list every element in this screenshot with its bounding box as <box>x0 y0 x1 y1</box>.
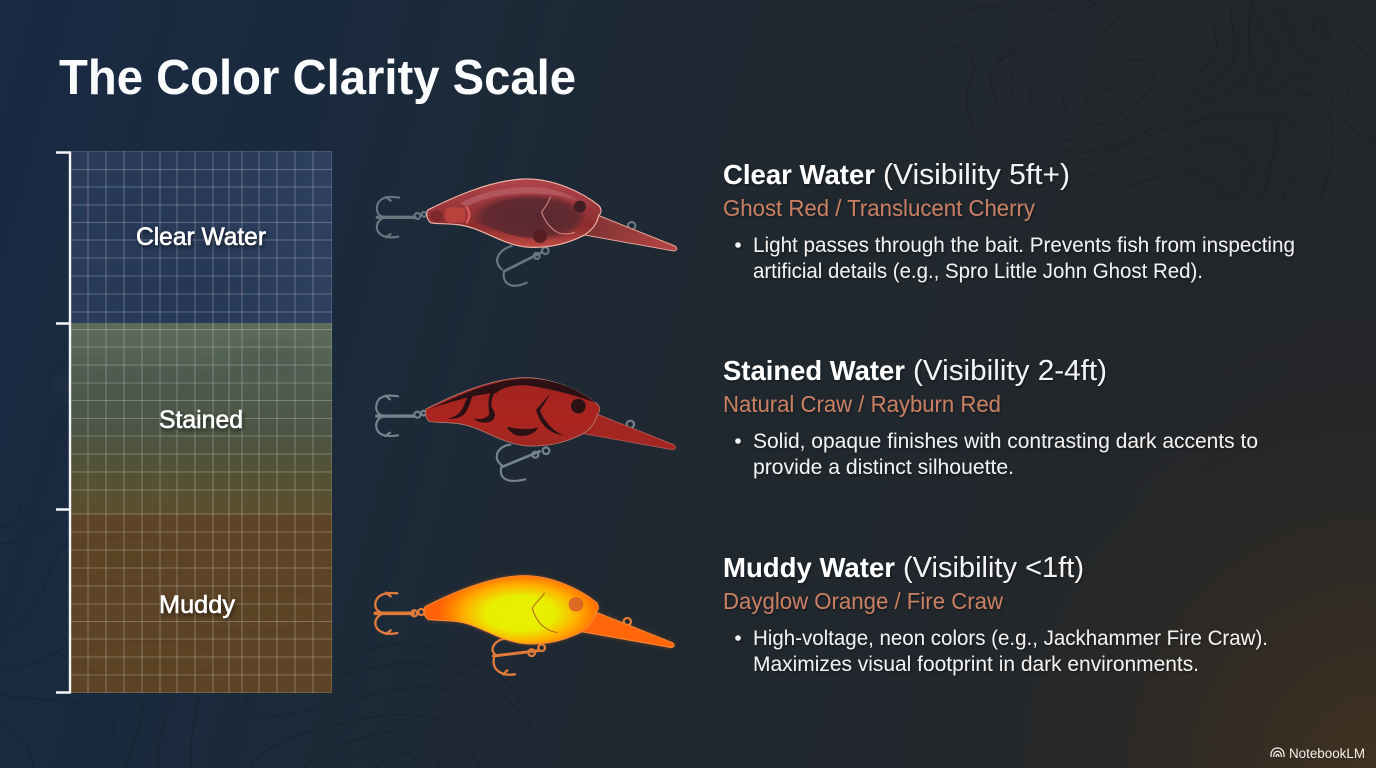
lure: ghost red <box>377 179 677 286</box>
bullet text: Light passes through the bait. Prevents fish from inspecting <box>753 233 1295 257</box>
subtitle: ghost red: Ghost Red / Translucent Cherry <box>723 195 1035 221</box>
bullet text <box>735 429 1258 479</box>
label: Stained: Stained <box>159 406 243 434</box>
bullet text <box>735 233 1295 283</box>
bullet text: Maximizes visual footprint in dark environments. <box>753 652 1199 676</box>
subtitle: dayglow orange: Dayglow Orange / Fire Craw <box>723 588 1004 614</box>
panel: muddy water description <box>723 552 1268 676</box>
icon: notebook arcs <box>1271 748 1284 757</box>
heading: stained water <box>723 355 1107 387</box>
heading: clear water: Clear Water <box>723 159 875 190</box>
craw markings <box>430 379 596 436</box>
zone: stained band <box>71 323 332 515</box>
heading: clear water: (Visibility 5ft+) <box>883 159 1070 191</box>
heading: muddy water: (Visibility <1ft) <box>903 552 1084 584</box>
bullet text: High-voltage, neon colors (e.g., Jackhammer Fire Craw). <box>753 626 1268 650</box>
heading: stained water: (Visibility 2-4ft) <box>913 355 1107 387</box>
heading: stained water: Stained Water <box>723 355 905 386</box>
label: Clear Water: Clear Water <box>136 223 266 251</box>
topographic contours top right <box>900 0 1376 199</box>
topographic contours bottom left <box>0 500 549 768</box>
panel: stained water description <box>723 355 1258 479</box>
lure: dayglow orange <box>375 576 674 675</box>
logo: NotebookLM: NotebookLM <box>1289 746 1365 761</box>
bullet text <box>735 626 1268 676</box>
bullet text: Solid, opaque finishes with contrasting dark accents to <box>753 429 1258 453</box>
lure: natural craw <box>376 378 676 481</box>
subtitle: natural craw: Natural Craw / Rayburn Red <box>723 391 1001 417</box>
bullet text: provide a distinct silhouette. <box>753 455 1014 479</box>
bullet text: artificial details (e.g., Spro Little John Ghost Red). <box>753 259 1203 283</box>
heading: muddy water: Muddy Water <box>723 552 895 583</box>
heading: muddy water <box>723 552 1084 584</box>
label: Muddy: Muddy <box>159 591 235 619</box>
panel: clear water description <box>723 159 1295 283</box>
zone: clear water band <box>71 151 332 323</box>
heading: clear water <box>723 159 1070 191</box>
zone: muddy band <box>71 515 332 693</box>
title: The Color Clarity Scale <box>59 51 576 105</box>
bracket scale <box>56 152 71 692</box>
water clarity scale column <box>60 151 332 693</box>
